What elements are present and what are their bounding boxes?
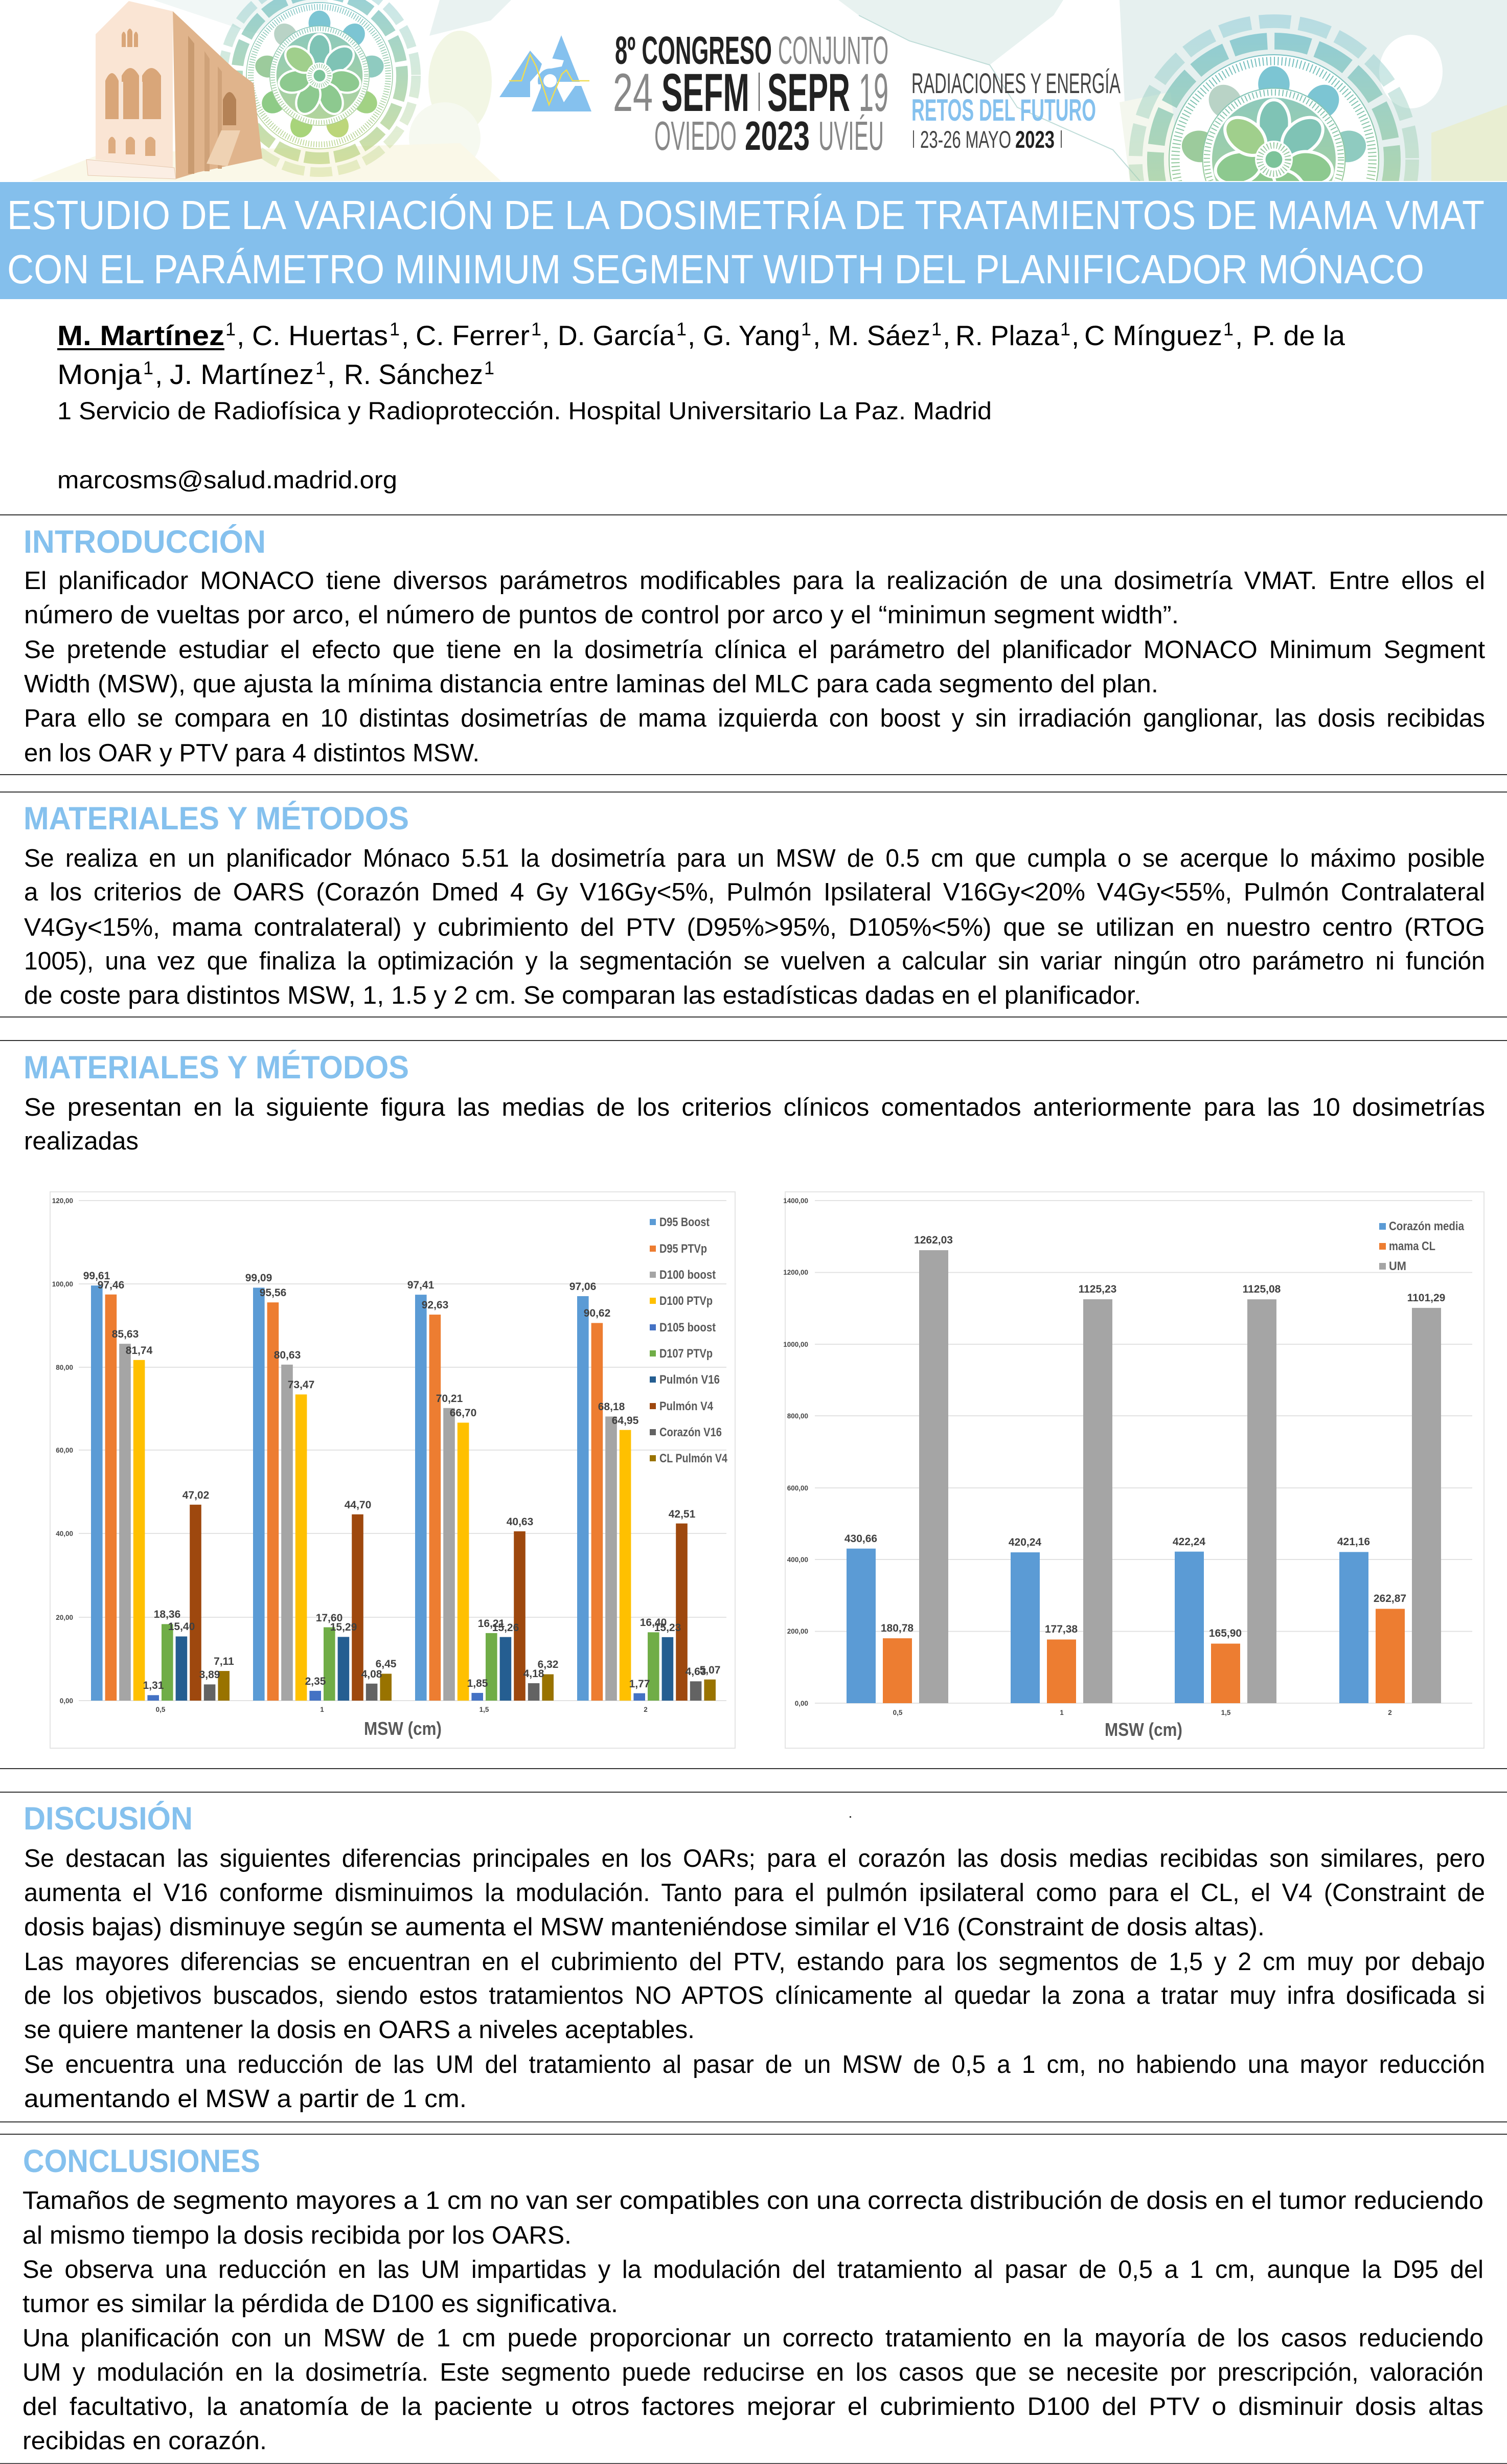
authors: , [401,320,409,351]
logo text: congress motto: 2023 [1015,126,1055,153]
text block: materiales y métodos: de coste para distintos MSW, 1, 1.5 y 2 cm. Se comparan las estadísticas dadas en el planificador. [24,982,1141,1009]
text block: introducción [24,567,1485,767]
text block: discusión: se quiere mantener la dosis en OARS a niveles aceptables. [24,2016,695,2044]
value labels: 177,38 [1045,1623,1078,1635]
authors: , [327,358,335,390]
value labels: 4,08 [361,1668,382,1680]
header banner [31,0,1507,181]
value labels: 430,66 [844,1533,877,1545]
text block: introducción: número de vueltas por arco, el número de puntos de control por arco y el “minimun segment width”. [24,601,1179,629]
text block: discusión: Las mayores diferencias se encuentran en el cubrimiento del PTV, estando para los segmentos de 1,5 y 2 cm muy por debajo [24,1948,1485,1976]
value labels: 6,32 [538,1659,558,1670]
authors: M. Martínez [57,320,224,351]
authors: P. de la [1252,320,1345,351]
y axis labels: 0,00 [795,1700,808,1707]
value labels: 1,85 [467,1678,488,1689]
value labels: 1262,03 [914,1234,953,1246]
bars: MSW 1,5 [1175,1299,1276,1703]
value labels [844,1234,1445,1639]
authors: R. Sánchez [344,358,483,390]
illustration: church building [86,1,262,179]
panel: conclusiones [22,2143,1483,2455]
value labels: 180,78 [881,1622,914,1634]
x axis labels: 0,5 [156,1706,166,1713]
text block: resultados [24,1094,1485,1155]
value labels: 70,21 [436,1393,463,1405]
value labels: 7,11 [214,1656,234,1667]
legend: CL Pulmón V4 [659,1452,728,1465]
value labels: 421,16 [1337,1536,1370,1548]
text block: introducción: Se pretende estudiar el efecto que tiene en la dosimetría clínica el parámetro del planificador MONACO Minimum Segment [24,636,1485,664]
value labels: 18,36 [154,1609,180,1620]
authors: 1 [1060,319,1070,340]
y axis labels: 80,00 [56,1364,73,1371]
text block: discusión: aumenta el V16 conforme disminuimos la modulación. Tanto para el pulmón ipsilateral como para el CL, el V4 (Constraint de [24,1879,1485,1907]
y axis labels: 200,00 [787,1627,808,1635]
value labels: 262,87 [1374,1593,1406,1604]
value labels: 1,31 [143,1680,164,1691]
chart: criterios clínicos por MSW [50,1192,735,1748]
logo: radiation triangles [499,35,591,111]
value labels: 97,06 [569,1281,596,1293]
background watercolour washes [31,0,1507,181]
value labels: 165,90 [1209,1627,1242,1639]
authors: , [237,320,244,351]
text block: resultados: Se presentan en la siguiente figura las medias de los criterios clínicos comentados anteriormente para las 10 dosimetrías [24,1094,1485,1121]
value labels: 420,24 [1009,1536,1041,1548]
logo text: congress name: OVIEDO [654,113,737,159]
y axis labels: 0,00 [60,1697,73,1705]
bars: MSW 2 [577,1296,716,1701]
value labels: 4,18 [523,1668,544,1680]
y axis labels: 800,00 [787,1412,808,1420]
authors: 1 [531,319,541,340]
value labels [83,1270,720,1691]
legend: UM [1389,1259,1406,1273]
value labels: 1101,29 [1407,1292,1445,1304]
y axis labels [783,1197,808,1707]
legend: D105 boost [659,1321,716,1335]
legend: Pulmón V16 [659,1373,720,1387]
authors: , [943,320,950,351]
text block: materiales y métodos: V4Gy<15%, mama contralateral) y cubrimiento del PTV (D95%>95%, D105%<5%) que se utilizan en nuestro centro (RTOG [24,914,1485,941]
x axis labels: 1,5 [480,1706,489,1713]
legend: D95 PTVp [659,1242,707,1256]
legend: Corazón media [1389,1219,1465,1233]
legend: D107 PTVp [659,1347,713,1361]
x axis labels [893,1709,1392,1740]
y axis labels: 1200,00 [783,1269,808,1276]
text block: discusión: aumentando el MSW a partir de 1 cm. [24,2085,467,2113]
legend: Corazón V16 [659,1426,722,1439]
value labels: 81,74 [126,1345,153,1357]
bars: MSW 1 [253,1287,392,1701]
logo text: congress motto [911,67,1121,153]
text block: conclusiones: tumor es similar la pérdida de D100 es significativa. [22,2290,618,2318]
value labels: 15,40 [168,1621,195,1633]
authors: , [1071,320,1079,351]
text block: conclusiones: Se observa una reducción en las UM impartidas y la modulación del tratamiento al pasar de 0,5 a 1 cm, aunque la D95 del [22,2256,1483,2284]
text block: introducción: en los OAR y PTV para 4 distintos MSW. [24,739,480,767]
authors: Monja [57,358,142,390]
value labels: 42,51 [669,1508,696,1520]
legend [1379,1219,1465,1273]
y axis labels: 1000,00 [783,1341,808,1348]
text block: introducción: El planificador MONACO tiene diversos parámetros modificables para la realización de una dosimetría VMAT. Entre ellos el [24,567,1485,595]
text block: conclusiones: Una planificación con un MSW de 1 cm puede proporcionar un correcto tratamiento en la mayoría de los casos reduciendo [22,2324,1483,2352]
value labels: 5,07 [700,1664,720,1676]
authors: R. Plaza [955,320,1059,351]
title band [0,182,1507,299]
y axis labels: 400,00 [787,1556,808,1564]
text block: conclusiones: al mismo tiempo la dosis recibida por los OARS. [22,2222,572,2249]
x axis labels: 1 [1060,1709,1064,1716]
value labels: 40,63 [507,1516,533,1528]
logo text: congress name: UVIÉU [818,113,884,159]
y axis labels: 40,00 [56,1530,73,1538]
x axis labels [156,1706,648,1739]
authors: D. García [558,320,675,351]
bars: MSW 0,5 [847,1250,948,1703]
legend: D95 Boost [659,1215,710,1229]
authors: , [688,320,695,351]
value labels: 66,70 [450,1407,476,1419]
value labels: 99,09 [245,1272,272,1284]
value labels: 1125,08 [1243,1283,1281,1295]
y axis labels: 60,00 [56,1446,73,1454]
value labels: 47,02 [182,1489,209,1501]
value labels: 16,21 [478,1618,505,1630]
text block: introducción: Width (MSW), que ajusta la mínima distancia entre laminas del MLC para cada segmento del plan. [24,670,1158,698]
value labels: 15,29 [330,1621,357,1633]
value labels: 92,63 [422,1299,448,1311]
logo text: congress motto: 23-26 MAYO [920,126,1011,153]
y axis labels: 1400,00 [783,1197,808,1205]
value labels: 17,60 [316,1612,342,1624]
authors: , [1235,320,1243,351]
authors: 1 [390,319,400,340]
value labels: 15,23 [654,1622,681,1634]
text block: materiales y métodos: Se realiza en un planificador Mónaco 5.51 la dosimetría para un MSW de 0.5 cm que cumpla o se acerque lo máximo posible [24,845,1485,872]
value labels: 15,26 [492,1622,519,1634]
authors: 1 [801,319,811,340]
value labels: 6,45 [376,1658,397,1670]
x axis labels: MSW (cm) [364,1718,442,1739]
illustration: rose window right [1129,14,1419,181]
value labels: 2,35 [305,1676,326,1687]
heading: conclusiones: CONCLUSIONES [23,2143,260,2179]
text block: materiales y métodos: a los criterios de OARS (Corazón Dmed 4 Gy V16Gy<5%, Pulmón Ipsilateral V16Gy<20% V4Gy<55%, Pulmón Contralateral [24,878,1485,906]
authors: 1 [484,357,494,378]
x axis labels: 2 [1388,1709,1392,1716]
panel: introducción [24,524,1485,767]
authors: C. Ferrer [416,320,530,351]
value labels: 16,40 [640,1617,667,1629]
value labels: 90,62 [584,1307,610,1319]
value labels: 80,63 [274,1349,301,1361]
logo text: congress name: CONJUNTO [778,29,888,73]
value labels: 85,63 [112,1328,139,1340]
value labels: 68,18 [598,1401,625,1413]
value labels: 99,61 [83,1270,110,1282]
value labels: 4,63 [686,1666,706,1678]
text block: conclusiones: recibidas en corazón. [22,2427,267,2455]
header banner: 19 [859,63,888,123]
authors: 1 [676,319,687,340]
logo text: congress name: SEPR [767,63,850,123]
x axis labels: 1,5 [1221,1709,1231,1716]
x axis labels: 0,5 [893,1709,903,1716]
text block: materiales y métodos: 1005), una vez que finaliza la optimización y la segmentación se vuelven a calcular sin variar ningún otro parámetro ni función [24,947,1485,975]
value labels: 97,41 [407,1279,435,1291]
text block: introducción: Para ello se compara en 10 distintas dosimetrías de mama izquierda con boost y sin irradiación ganglionar, las dosis recibidas [24,705,1485,732]
value labels: 73,47 [288,1379,314,1391]
logo text: congress name [614,36,887,150]
text block: resultados: realizadas [24,1127,139,1155]
authors [57,319,1345,390]
authors: 1 [143,357,153,378]
value labels: 3,89 [199,1669,220,1681]
bars: MSW 2 [1339,1308,1441,1703]
authors: 1 [315,357,326,378]
authors: J. Martínez [170,358,314,390]
y axis labels: 100,00 [52,1280,73,1288]
legend: D100 PTVp [659,1294,713,1308]
heading: introducción: INTRODUCCIÓN [24,524,266,560]
illustration: rose window left [223,0,416,172]
authors: , [155,358,163,390]
logo text: congress name: 8º CONGRESO [615,29,772,73]
text block: discusión: Se encuentra una reducción de las UM del tratamiento al pasar de un MSW de 0,5 a 1 cm, no habiendo una mayor reducción [24,2051,1485,2078]
authors: 1 [1223,319,1234,340]
stray dot mark [850,1816,851,1818]
text block: conclusiones [22,2187,1483,2455]
panel: discusión [24,1801,1485,2113]
bars: MSW 0,5 [91,1285,230,1701]
bars: MSW 1 [1011,1299,1112,1703]
value labels: 422,24 [1173,1536,1205,1548]
heading: discusión: DISCUSIÓN [24,1801,193,1837]
logo text: congress name: 24 [613,63,653,123]
bars: MSW 1,5 [415,1295,554,1701]
heading: resultados: MATERIALES Y MÉTODOS [24,1050,409,1086]
affiliation and email: 1 Servicio de Radiofísica y Radioprotección. Hospital Universitario La Paz. Madrid [57,398,992,425]
authors: 1 [225,319,236,340]
logo text: congress motto: RETOS DEL FUTURO [911,93,1096,127]
chart: corazón media, mama CL y UM por MSW [783,1192,1484,1748]
authors: M. Sáez [828,320,930,351]
text block: discusión: dosis bajas) disminuye según se aumenta el MSW manteniéndose similar el V16 (Constraint de dosis altas). [24,1913,1265,1941]
legend: mama CL [1389,1239,1435,1253]
affiliation and email [57,398,992,494]
value labels: 97,46 [98,1279,124,1291]
legend [650,1215,728,1465]
y axis labels: 600,00 [787,1484,808,1492]
text block: discusión: Se destacan las siguientes diferencias principales en los OARs; para el corazón las dosis medias recibidas son similares, pero [24,1845,1485,1872]
logo text: congress motto: RADIACIONES Y ENERGÍA [911,67,1121,99]
authors: 1 [931,319,942,340]
x axis labels: MSW (cm) [1105,1719,1182,1740]
text block: conclusiones: del facultativo, la anatomía de la paciente u otros factores mejorar el cubrimiento D100 del PTV o disminuir dosis altas [22,2393,1483,2421]
authors: C Mínguez [1084,320,1222,351]
panel: materiales y métodos [24,801,1485,1009]
authors: , [542,320,550,351]
panel: resultados [24,1050,1485,1155]
authors: G. Yang [703,320,800,351]
logo text: congress name: 2023 [745,113,810,159]
x axis labels: 1 [320,1706,324,1713]
affiliation and email: marcosms@salud.madrid.org [57,467,397,494]
authors: C. Huertas [252,320,388,351]
text block: conclusiones: UM y modulación en la dosimetría. Este segmento puede reducirse en los casos que se necesite por prescripción, valoración [22,2359,1483,2386]
text block: discusión [24,1845,1485,2113]
logo text: congress name: SEFM [661,63,749,123]
y axis labels: 20,00 [56,1614,73,1621]
authors: , [813,320,820,351]
value labels: 44,70 [345,1499,371,1511]
value labels: 1125,23 [1079,1283,1116,1295]
legend: Pulmón V4 [659,1399,714,1413]
value labels: 64,95 [612,1415,639,1427]
y axis labels: 120,00 [52,1197,73,1205]
text block: conclusiones: Tamaños de segmento mayores a 1 cm no van ser compatibles con una correcta distribución de dosis en el tumor reduciendo [22,2187,1483,2214]
heading: materiales y métodos: MATERIALES Y MÉTODOS [24,801,409,837]
y axis labels [52,1197,73,1705]
value labels: 1,77 [629,1678,650,1690]
legend: D100 boost [659,1268,716,1282]
value labels: 95,56 [260,1287,286,1299]
text block: discusión: de los objetivos buscados, siendo estos tratamientos NO APTOS clínicamente al quedar la zona a tratar muy infra dosificada si [24,1982,1485,2009]
x axis labels: 2 [644,1706,648,1713]
text block: materiales y métodos [24,845,1485,1009]
